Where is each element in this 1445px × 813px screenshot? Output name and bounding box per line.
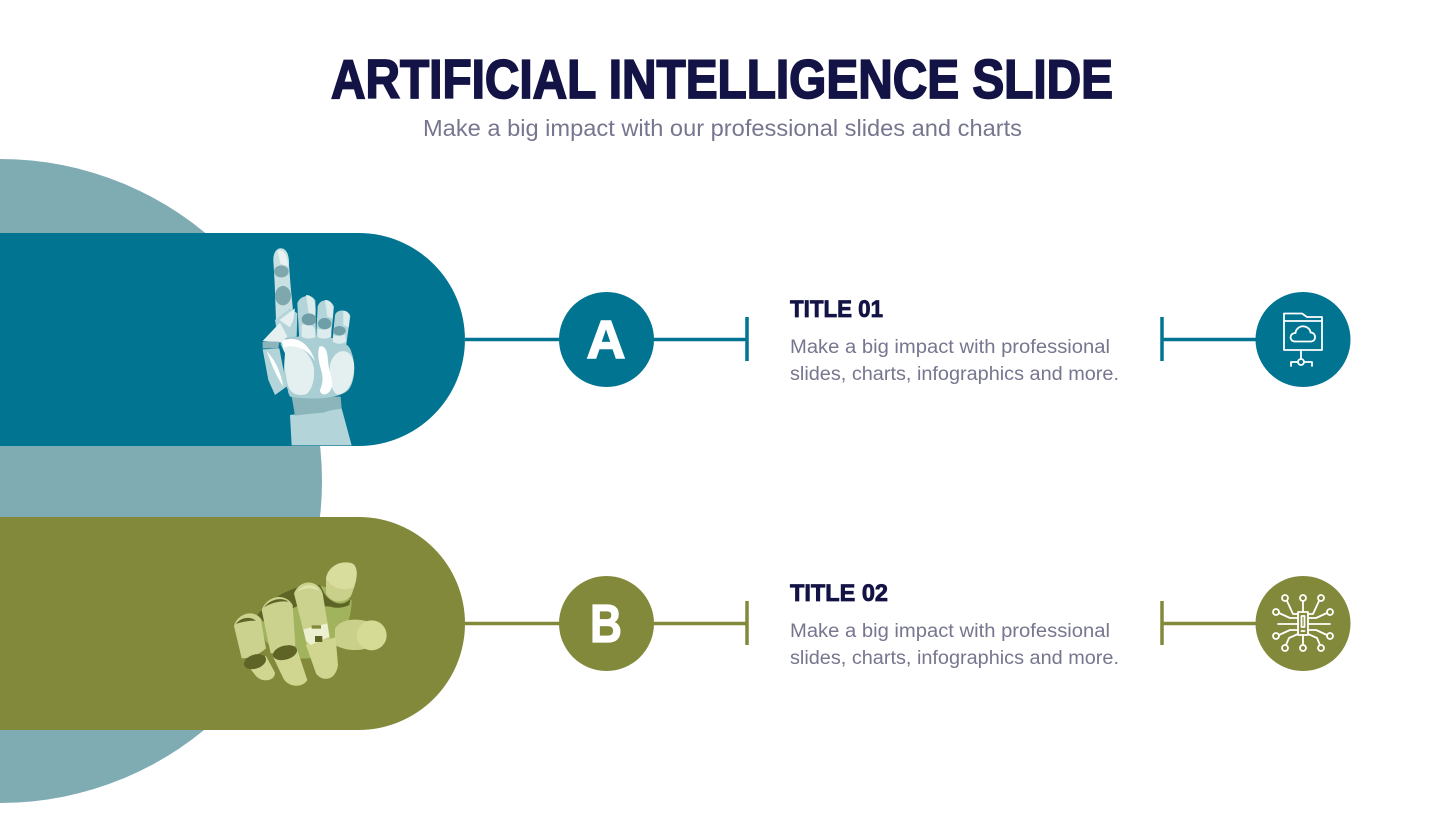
background semicircle (0, 159, 322, 803)
badge B (559, 576, 654, 671)
text block: title 02 (790, 580, 1119, 669)
icon: robot hand pointing sideways (234, 562, 387, 686)
text block: title 01: TITLE 01 (790, 296, 883, 323)
badge B: B (590, 594, 622, 654)
icon: cloud folder presentation (1256, 292, 1350, 387)
text block: title 02: TITLE 02 (790, 580, 888, 607)
text block: title 02: slides, charts, infographics and more. (790, 648, 1119, 669)
badge A (559, 292, 654, 387)
connector A right (1162, 317, 1256, 361)
icon: robot hand pointing up (263, 248, 354, 445)
text block: title 01: slides, charts, infographics and more. (790, 364, 1119, 385)
connector B right (1162, 601, 1256, 645)
panel: olive pill B (0, 517, 465, 730)
text block: title 01 (790, 296, 1119, 385)
subtitle: Make a big impact with our professional slides and charts (423, 115, 1022, 141)
panel: teal pill A (0, 233, 465, 446)
icon: circuit chip (1256, 576, 1350, 671)
title: ARTIFICIAL INTELLIGENCE SLIDE (331, 48, 1113, 110)
connector B left (465, 601, 747, 645)
text block: title 01: Make a big impact with professional (790, 337, 1110, 358)
connector A left (465, 317, 747, 361)
badge A: A (586, 310, 626, 370)
text block: title 02: Make a big impact with professional (790, 621, 1110, 642)
